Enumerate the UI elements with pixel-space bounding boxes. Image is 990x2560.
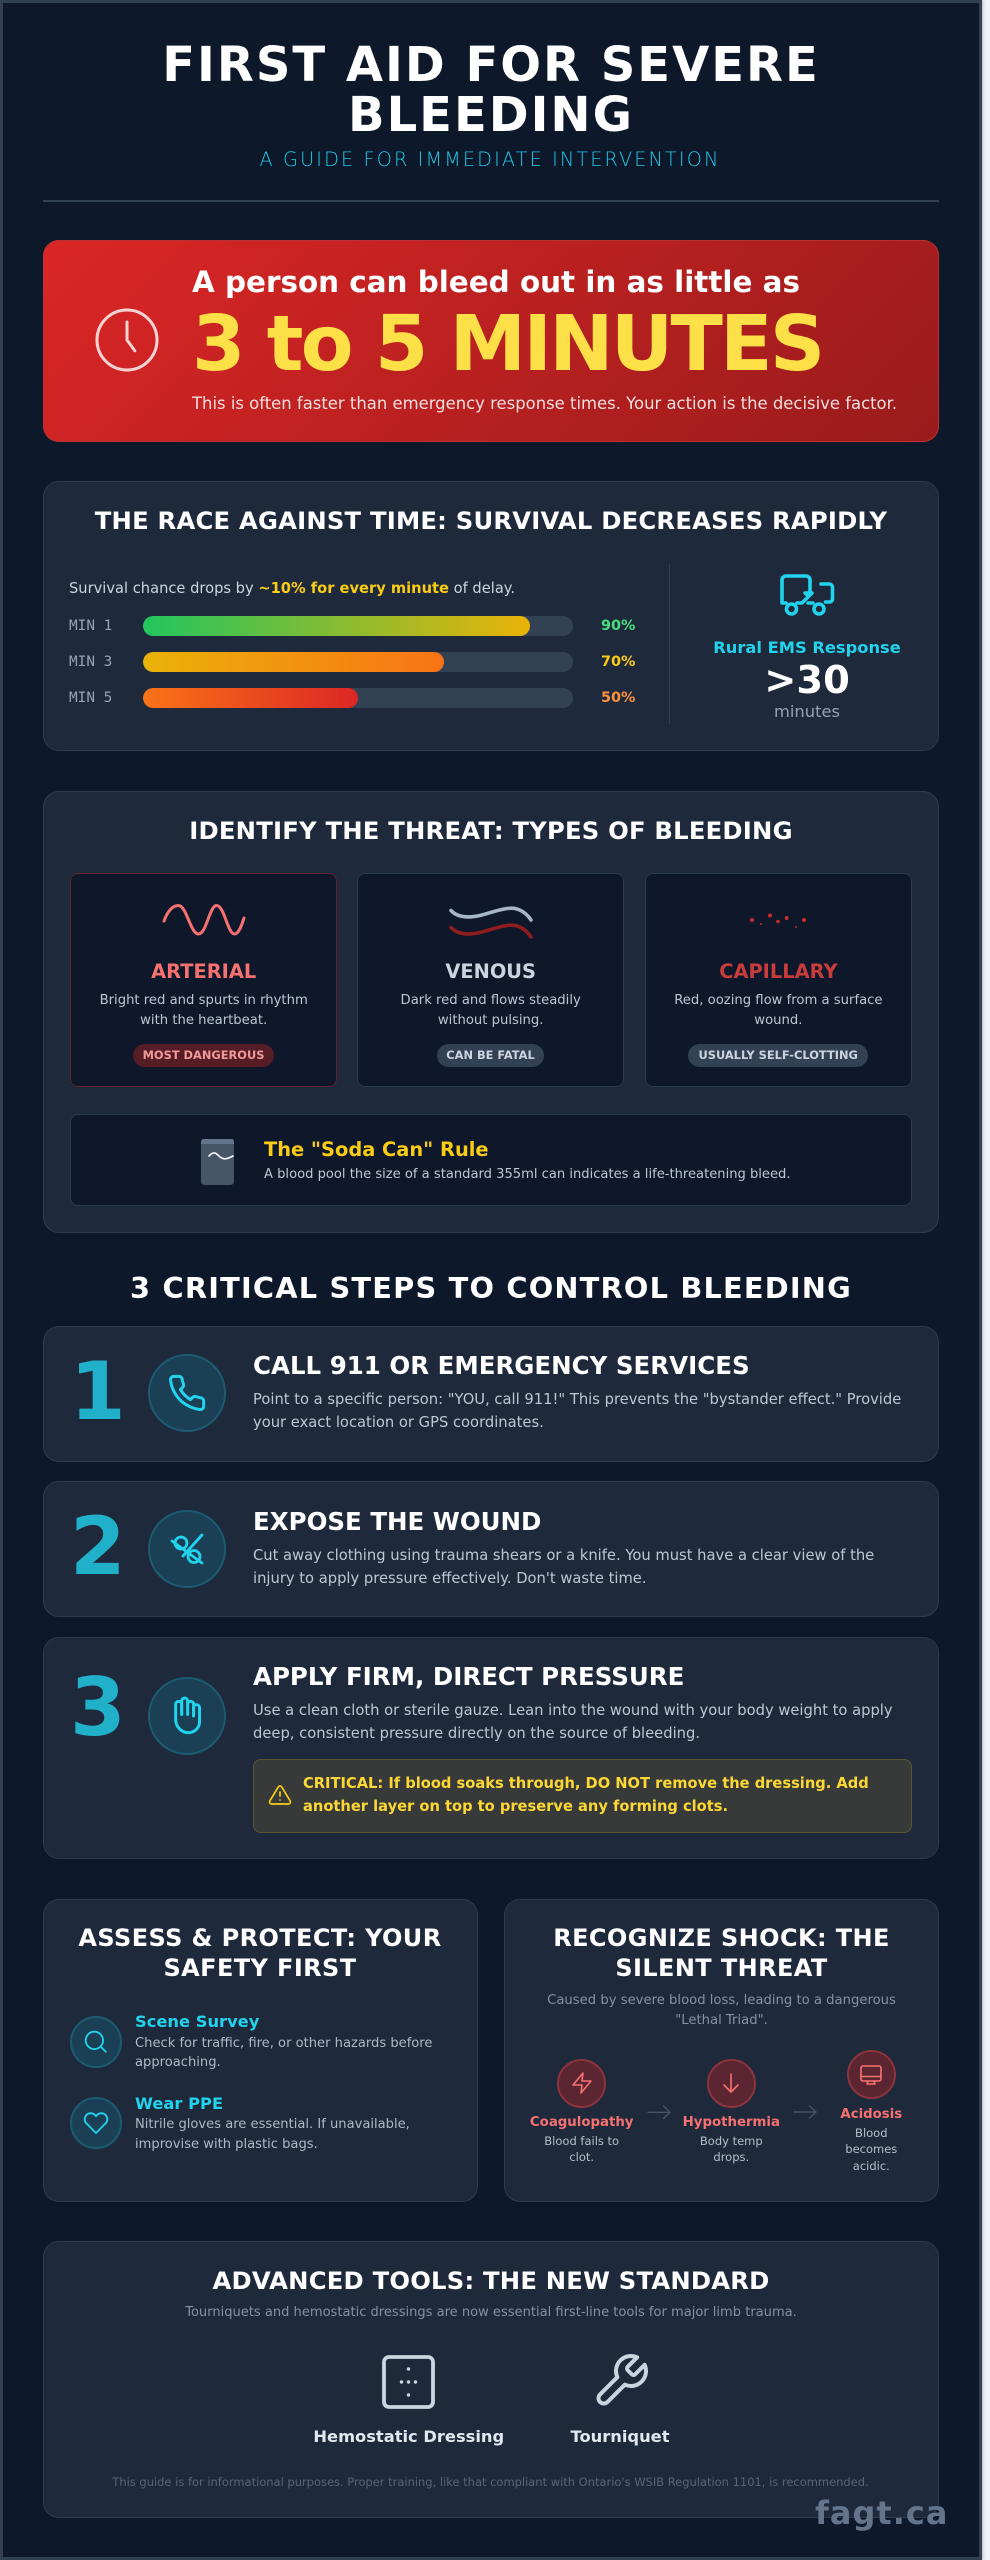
icon: hand <box>148 1677 226 1755</box>
step description <box>253 1702 893 1742</box>
description: Blood fails to <box>544 2134 619 2148</box>
tag: most dangerous: MOST DANGEROUS <box>143 1048 264 1062</box>
callout: critical warning <box>253 1759 912 1833</box>
rule title: The "Soda Can" Rule <box>264 1138 489 1160</box>
title <box>162 37 820 143</box>
description: with the heartbeat. <box>140 1013 267 1028</box>
label: minute 3: MIN 3 <box>69 654 112 670</box>
heading <box>553 1924 890 1982</box>
step number: 3 <box>70 1661 126 1754</box>
panel: advanced tools <box>43 2241 939 2518</box>
warning text <box>303 1775 869 1815</box>
tag: usually self-clotting <box>688 1044 868 1067</box>
intro text: Caused by severe blood loss, leading to a dangerous <box>547 1993 896 2008</box>
title: FIRST AID FOR SEVERE <box>162 37 820 93</box>
bar: minute 3 <box>143 652 573 672</box>
description: becomes <box>845 2142 897 2156</box>
item description: Check for traffic, fire, or other hazards before <box>135 2036 432 2050</box>
icon: down arrow <box>707 2058 756 2108</box>
step description: Cut away clothing using trauma shears or a knife. You must have a clear view of the <box>253 1546 874 1564</box>
bar: minute 1 <box>143 616 573 636</box>
tag: most dangerous <box>133 1044 274 1067</box>
arrow <box>793 2105 817 2119</box>
tag: can be fatal: CAN BE FATAL <box>446 1048 535 1062</box>
hero lead text: A person can bleed out in as little as <box>192 265 800 299</box>
step number: 1 <box>70 1345 126 1438</box>
description <box>674 993 883 1028</box>
label: minute 5: MIN 5 <box>69 690 112 706</box>
description: Bright red and spurts in rhythm <box>100 993 308 1008</box>
heading: THE RACE AGAINST TIME: SURVIVAL DECREASES RAPIDLY <box>95 506 887 535</box>
icon: hemostatic dressing <box>382 2355 435 2409</box>
value: over 30: >30 <box>764 658 850 702</box>
callout: soda can rule <box>70 1114 912 1206</box>
description: wound. <box>754 1013 802 1028</box>
item description: improvise with plastic bags. <box>135 2137 318 2152</box>
icon: phone <box>148 1354 226 1432</box>
description <box>700 2134 763 2164</box>
subtitle: A GUIDE FOR IMMEDIATE INTERVENTION <box>260 148 720 171</box>
step description <box>253 1546 874 1586</box>
card: venous <box>357 873 624 1087</box>
heading: IDENTIFY THE THREAT: TYPES OF BLEEDING <box>189 816 793 844</box>
intro text <box>547 1993 896 2028</box>
step description: deep, consistent pressure directly on the source of bleeding. <box>253 1725 700 1742</box>
item heading: Scene Survey <box>135 2012 259 2031</box>
value: 70%: 70% <box>601 654 635 670</box>
description: Blood <box>855 2126 888 2140</box>
icon: tourniquet wrench <box>596 2354 648 2406</box>
step description: Use a clean cloth or sterile gauze. Lean into the wound with your body weight to apply <box>253 1702 893 1719</box>
icon: scissors <box>148 1510 226 1588</box>
tag: usually self-clotting: USUALLY SELF-CLOTTING <box>699 1048 858 1062</box>
panel: step 2 <box>43 1481 939 1617</box>
title: BLEEDING <box>348 87 634 143</box>
intro text: Tourniquets and hemostatic dressings are now essential first-line tools for major limb trauma. <box>185 2305 797 2320</box>
description: without pulsing. <box>438 1013 543 1028</box>
step heading: CALL 911 OR EMERGENCY SERVICES <box>253 1351 750 1380</box>
description: Dark red and flows steadily <box>401 993 581 1008</box>
card: capillary <box>645 873 912 1087</box>
panel: hero warning <box>43 240 939 442</box>
icon: capillary dots <box>750 914 806 928</box>
description: Body temp <box>700 2134 763 2148</box>
step description: injury to apply pressure effectively. Don't waste time. <box>253 1570 647 1586</box>
panel: race against time <box>43 481 939 751</box>
icon: clock <box>96 308 158 372</box>
step description: Point to a specific person: "YOU, call 911!" This prevents the "bystander effect." Provide <box>253 1391 901 1408</box>
panel: recognize shock <box>504 1899 939 2202</box>
panel: assess and protect <box>43 1899 478 2202</box>
icon: heart <box>70 2097 122 2149</box>
label: hemostatic dressing: Hemostatic Dressing <box>313 2427 504 2446</box>
name: venous: VENOUS <box>445 960 536 983</box>
panel: step 3 <box>43 1637 939 1859</box>
step number: 2 <box>70 1500 126 1593</box>
step heading: APPLY FIRM, DIRECT PRESSURE <box>253 1662 684 1691</box>
description <box>544 2134 619 2164</box>
icon: monitor <box>847 2050 896 2099</box>
description: acidic. <box>853 2159 890 2173</box>
heading: ADVANCED TOOLS: THE NEW STANDARD <box>212 2266 770 2295</box>
label: hypothermia: Hypothermia <box>683 2115 780 2130</box>
heading: SAFETY FIRST <box>163 1954 356 1982</box>
description: clot. <box>569 2150 594 2164</box>
label: minute 1: MIN 1 <box>69 618 112 634</box>
item description <box>135 2036 432 2070</box>
name: arterial: ARTERIAL <box>151 960 256 983</box>
hero big number: 3 to 5 MINUTES <box>192 300 823 389</box>
panel: types of bleeding <box>43 791 939 1233</box>
item description: approaching. <box>135 2055 221 2070</box>
icon: venous flow <box>449 906 533 939</box>
bar: minute 5 <box>143 688 573 708</box>
label: rural EMS response: Rural EMS Response <box>713 638 901 657</box>
item description: Nitrile gloves are essential. If unavailable, <box>135 2117 410 2132</box>
label: acidosis: Acidosis <box>840 2107 902 2122</box>
intro text: Survival chance drops by ~10% for every minute of delay. <box>69 580 515 597</box>
icon: lightning <box>557 2058 606 2108</box>
footer note: This guide is for informational purposes. Proper training, like that compliant with Ontario's WSIB Regulation 1101, is recommended. <box>112 2475 869 2489</box>
intro text: "Lethal Triad". <box>675 2013 768 2028</box>
heading <box>78 1924 442 1982</box>
item description <box>135 2117 410 2152</box>
rule description: A blood pool the size of a standard 355ml can indicates a life-threatening bleed. <box>264 1167 791 1182</box>
heading: RECOGNIZE SHOCK: THE <box>553 1924 890 1952</box>
step description: your exact location or GPS coordinates. <box>253 1414 544 1431</box>
icon: search <box>70 2016 122 2068</box>
description <box>845 2126 897 2173</box>
step description <box>253 1391 901 1431</box>
description: drops. <box>713 2150 749 2164</box>
tag: can be fatal <box>437 1044 544 1067</box>
label: coagulopathy: Coagulopathy <box>530 2115 633 2130</box>
heading: ASSESS & PROTECT: YOUR <box>78 1924 442 1952</box>
label: tourniquet: Tourniquet <box>570 2427 670 2446</box>
warning text: another layer on top to preserve any forming clots. <box>303 1798 728 1815</box>
value: 90%: 90% <box>601 618 635 634</box>
card: arterial <box>70 873 337 1087</box>
description <box>100 993 308 1028</box>
item heading: Wear PPE <box>135 2094 223 2113</box>
unit: minutes: minutes <box>774 702 840 721</box>
value: 50%: 50% <box>601 690 635 706</box>
heading: critical steps: 3 CRITICAL STEPS TO CONTROL BLEEDING <box>130 1271 852 1305</box>
hero note: This is often faster than emergency response times. Your action is the decisive factor. <box>192 394 897 413</box>
heading: SILENT THREAT <box>615 1954 828 1982</box>
icon: arterial wave <box>162 904 246 936</box>
panel: step 1 <box>43 1326 939 1462</box>
icon: warning triangle <box>268 1785 292 1805</box>
watermark: fagt.ca <box>815 2494 948 2532</box>
arrow <box>647 2105 671 2120</box>
description: Red, oozing flow from a surface <box>674 993 883 1008</box>
icon: ambulance truck <box>780 574 834 616</box>
warning text: CRITICAL: If blood soaks through, DO NOT remove the dressing. Add <box>303 1775 869 1792</box>
name: capillary: CAPILLARY <box>719 960 838 983</box>
step heading: EXPOSE THE WOUND <box>253 1506 541 1536</box>
description <box>401 993 581 1028</box>
icon: soda can <box>201 1139 234 1185</box>
